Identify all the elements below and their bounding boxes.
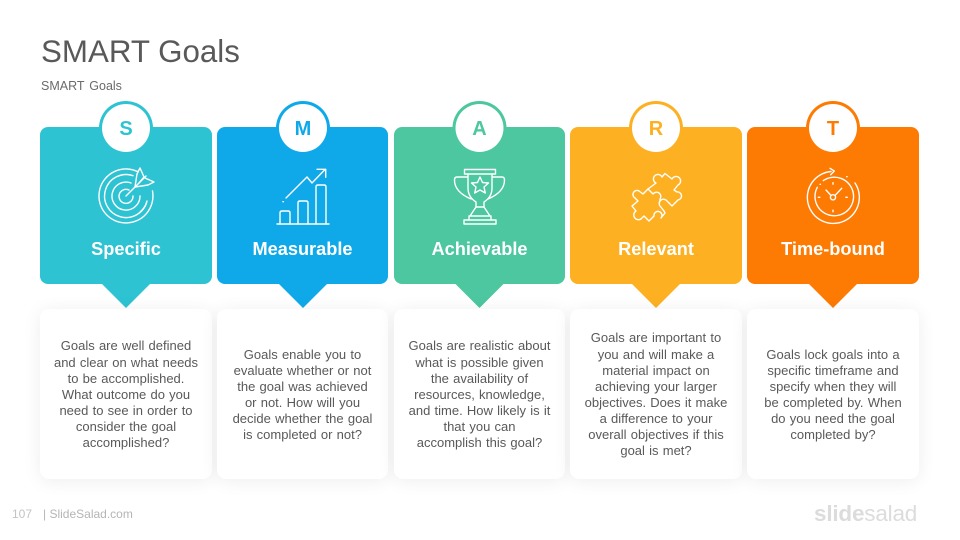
icon: clock with arrow xyxy=(806,168,860,224)
text panel: Specific: accomplished? xyxy=(83,435,169,450)
text panel: Achievable: Goals are realistic about xyxy=(408,338,550,353)
label: Specific: Specific xyxy=(91,239,161,259)
footer site name: | SlideSalad.com xyxy=(43,507,133,521)
card: Specific xyxy=(40,101,212,308)
footer logo: slidesalad xyxy=(814,501,917,526)
text panel: Achievable: and time. How likely is it xyxy=(409,403,550,418)
text panel: Time-bound: specific timeframe and xyxy=(767,363,899,378)
text panel: Relevant: overall objectives if this xyxy=(588,427,724,442)
text panel: Time-bound xyxy=(747,309,919,479)
text panel: Relevant: achieving your larger xyxy=(595,379,717,394)
icon: target with darts xyxy=(98,167,155,224)
text panel: Achievable xyxy=(394,309,565,479)
card: Measurable xyxy=(217,101,388,308)
text panel: Relevant: you and will make a xyxy=(598,347,714,362)
icon: growth chart xyxy=(276,168,330,225)
card: Achievable xyxy=(394,101,565,308)
text panel: Measurable: or not. How will you xyxy=(245,395,360,410)
card: Time-bound xyxy=(747,101,919,308)
title: SMART Goals xyxy=(41,34,240,69)
label: Time-bound: Time-bound xyxy=(781,239,885,259)
text panel: Measurable: decide whether the goal xyxy=(233,411,372,426)
text panel: Specific: consider the goal xyxy=(76,419,176,434)
text panel: Achievable: the availability of xyxy=(431,371,528,386)
letter R: R xyxy=(649,118,663,140)
label: Relevant: Relevant xyxy=(618,239,694,259)
text panel: Measurable xyxy=(217,309,388,479)
text panel: Achievable: what is possible given xyxy=(415,355,544,370)
text panel: Time-bound: be completed by. When xyxy=(764,395,902,410)
icon: trophy xyxy=(454,168,506,225)
text panel: Specific: to be accomplished. xyxy=(68,371,184,386)
text panel: Specific xyxy=(40,309,212,479)
text panel: Measurable: Goals enable you to xyxy=(244,347,361,362)
text panel: Relevant: goal is met? xyxy=(620,443,692,458)
label: Achievable: Achievable xyxy=(431,239,528,259)
text panel: Time-bound: Goals lock goals into a xyxy=(766,347,900,362)
subtitle: SMART Goals xyxy=(41,79,122,93)
text panel: Relevant: Goals are important to xyxy=(591,330,721,345)
text panel: Relevant: a difference to your xyxy=(600,411,712,426)
text panel: Time-bound: do you need the goal xyxy=(771,411,895,426)
text panel: Relevant: objectives. Does it make xyxy=(585,395,727,410)
card: Relevant xyxy=(570,101,742,308)
letter M: M xyxy=(295,118,311,140)
text panel: Specific: and clear on what needs xyxy=(54,355,198,370)
text panel: Specific: need to see in order to xyxy=(59,403,193,418)
text panel: Achievable: resources, knowledge, xyxy=(414,387,545,402)
text panel: Specific: What outcome do you xyxy=(62,387,190,402)
panel: card shapes xyxy=(40,101,919,308)
letter A: A xyxy=(472,118,487,140)
letter S: S xyxy=(119,118,133,140)
text panel: Relevant: material impact on xyxy=(602,363,710,378)
text panel: Measurable: evaluate whether or not xyxy=(234,363,371,378)
text panel: Time-bound: completed by? xyxy=(790,427,876,442)
text panel: Achievable: that you can xyxy=(443,419,516,434)
icon: puzzle pieces xyxy=(631,172,682,222)
text panel: Measurable: the goal was achieved xyxy=(237,379,368,394)
text panel: Achievable: accomplish this goal? xyxy=(417,435,542,450)
letter T: T xyxy=(827,118,839,140)
text panel: Specific: Goals are well defined xyxy=(61,338,191,353)
label: Measurable: Measurable xyxy=(252,239,353,259)
text panel: Time-bound: specify when they will xyxy=(770,379,896,394)
footer page number: 107 xyxy=(12,507,32,521)
text panel: Relevant xyxy=(570,309,742,479)
text panel: Measurable: is completed or not? xyxy=(243,427,362,442)
